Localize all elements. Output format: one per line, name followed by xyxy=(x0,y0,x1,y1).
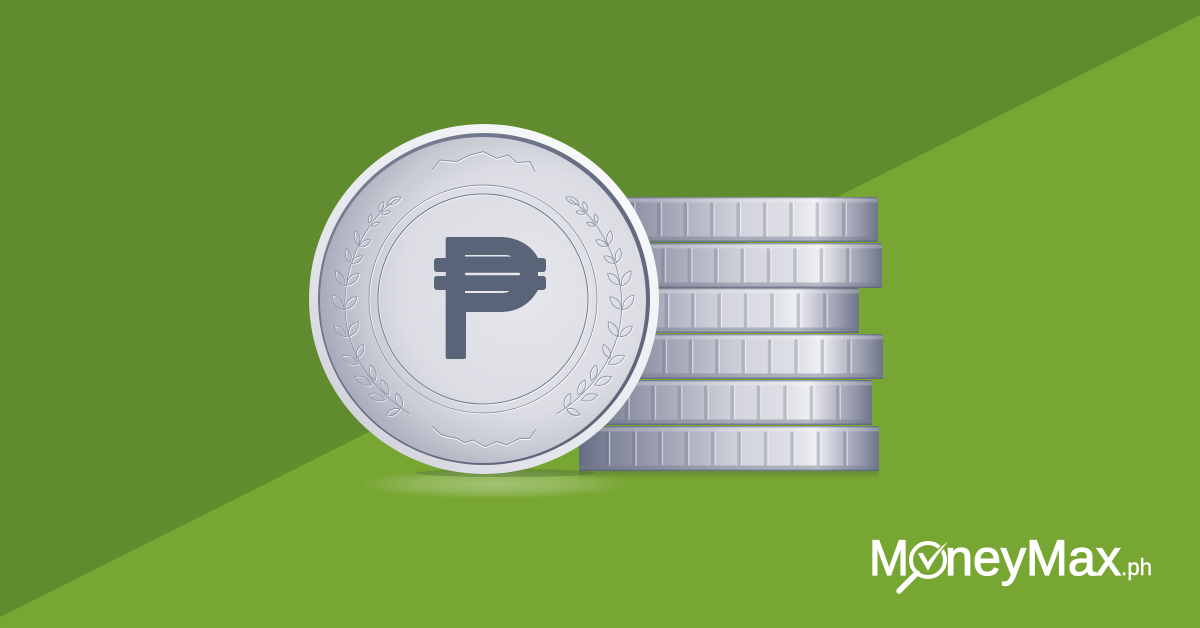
coin inner ring xyxy=(318,133,650,465)
stack coin 4 xyxy=(583,334,883,379)
logo: MoneyMax.ph xyxy=(869,530,1152,591)
logo text: M: M xyxy=(869,530,909,586)
concentric circles xyxy=(369,185,598,414)
ground shadow and glow xyxy=(360,469,879,499)
stack coin 5 xyxy=(572,380,872,425)
right laurel xyxy=(557,197,635,416)
icon: magnifier with check mark xyxy=(899,539,951,591)
stack coin 3 xyxy=(559,288,859,333)
logo text: .ph: .ph xyxy=(1121,554,1152,580)
stack coin 6 xyxy=(579,426,879,471)
top zigzag xyxy=(432,152,535,173)
laurel wreaths and zigzags xyxy=(333,152,635,448)
icon: peso sign xyxy=(434,237,546,359)
logo text: neyMax: neyMax xyxy=(945,530,1121,586)
coin face xyxy=(320,137,646,463)
bottom zigzag xyxy=(432,427,536,448)
stack coin 2 xyxy=(582,243,882,288)
stack coin 1 xyxy=(578,197,878,242)
left laurel xyxy=(333,197,411,416)
front peso coin xyxy=(309,124,659,474)
stack of coins xyxy=(559,197,883,471)
coin rim xyxy=(309,124,659,474)
